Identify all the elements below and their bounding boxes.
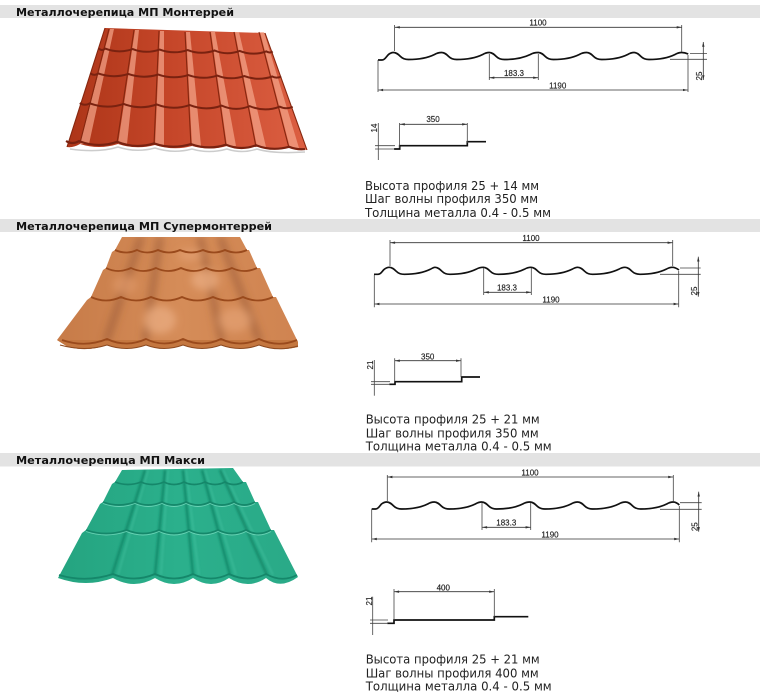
roof image: red Монтеррей sheet <box>66 28 307 153</box>
dimension lines and labels: 183.3 <box>504 69 525 78</box>
step diagram: Монтеррей: 14 <box>370 123 379 132</box>
section header: Монтеррей: Металлочерепица МП Монтеррей <box>16 6 234 19</box>
dimension lines and labels: 183.3 <box>496 519 517 528</box>
specs: Макси: Шаг волны профиля 400 мм <box>366 666 539 680</box>
specs: Монтеррей: Толщина металла 0.4 - 0.5 мм <box>364 206 551 220</box>
step diagram: Макси: 400 <box>437 583 451 592</box>
dimension lines and labels: 1100 <box>529 19 547 28</box>
roof image: green Макси sheet <box>58 468 298 584</box>
dimension lines and labels <box>372 468 702 542</box>
dimension lines and labels: 25 <box>695 71 704 80</box>
wave profile line <box>378 52 688 60</box>
section header: Супермонтеррей <box>0 219 760 233</box>
profile diagram: Макси cross-section <box>372 468 702 542</box>
step diagram: Монтеррей: 350 <box>426 115 440 124</box>
specs: Макси <box>365 652 552 692</box>
step diagram: Монтеррей <box>370 115 486 160</box>
specs: Монтеррей <box>364 179 551 220</box>
profile diagram: Монтеррей cross-section <box>378 19 707 92</box>
specs: Супермонтеррей <box>365 412 552 454</box>
specs: Макси: Высота профиля 25 + 21 мм <box>366 652 540 666</box>
section header: Макси: Металлочерепица МП Макси <box>16 454 205 467</box>
section header: Супермонтеррей: Металлочерепица МП Супермонтеррей <box>16 220 272 233</box>
dimension lines and labels <box>374 234 701 307</box>
dimension lines and labels: 1190 <box>541 530 559 539</box>
specs: Супермонтеррей: Толщина металла 0.4 - 0.5 мм <box>365 440 552 454</box>
step diagram: Супермонтеррей <box>366 352 480 396</box>
roof image: terracotta Супермонтеррей sheet <box>57 237 298 350</box>
wave profile line <box>372 502 679 509</box>
dimension lines and labels: 25 <box>690 522 699 531</box>
dimension lines and labels: 1100 <box>522 234 540 243</box>
dimension lines and labels: 1190 <box>542 295 560 304</box>
section header: Монтеррей <box>0 5 760 19</box>
dimension lines and labels: 1190 <box>549 82 567 90</box>
dimension lines and labels: 1100 <box>521 468 539 477</box>
specs: Монтеррей: Высота профиля 25 + 14 мм <box>365 179 539 193</box>
dimension lines and labels: 25 <box>690 286 699 295</box>
profile diagram: Супермонтеррей cross-section <box>374 234 701 307</box>
specs: Супермонтеррей: Высота профиля 25 + 21 мм <box>366 412 540 426</box>
section header: Макси <box>0 453 760 467</box>
specs: Супермонтеррей: Шаг волны профиля 350 мм <box>366 426 539 440</box>
dimension lines and labels <box>378 19 707 92</box>
dimension lines and labels: 183.3 <box>497 284 518 293</box>
wave profile line <box>374 267 679 274</box>
step diagram: Супермонтеррей: 350 <box>421 352 435 361</box>
step diagram: Макси: 21 <box>365 596 374 605</box>
step diagram: Макси <box>365 583 528 635</box>
step diagram: Супермонтеррей: 21 <box>366 360 375 369</box>
specs: Монтеррей: Шаг волны профиля 350 мм <box>365 192 538 206</box>
